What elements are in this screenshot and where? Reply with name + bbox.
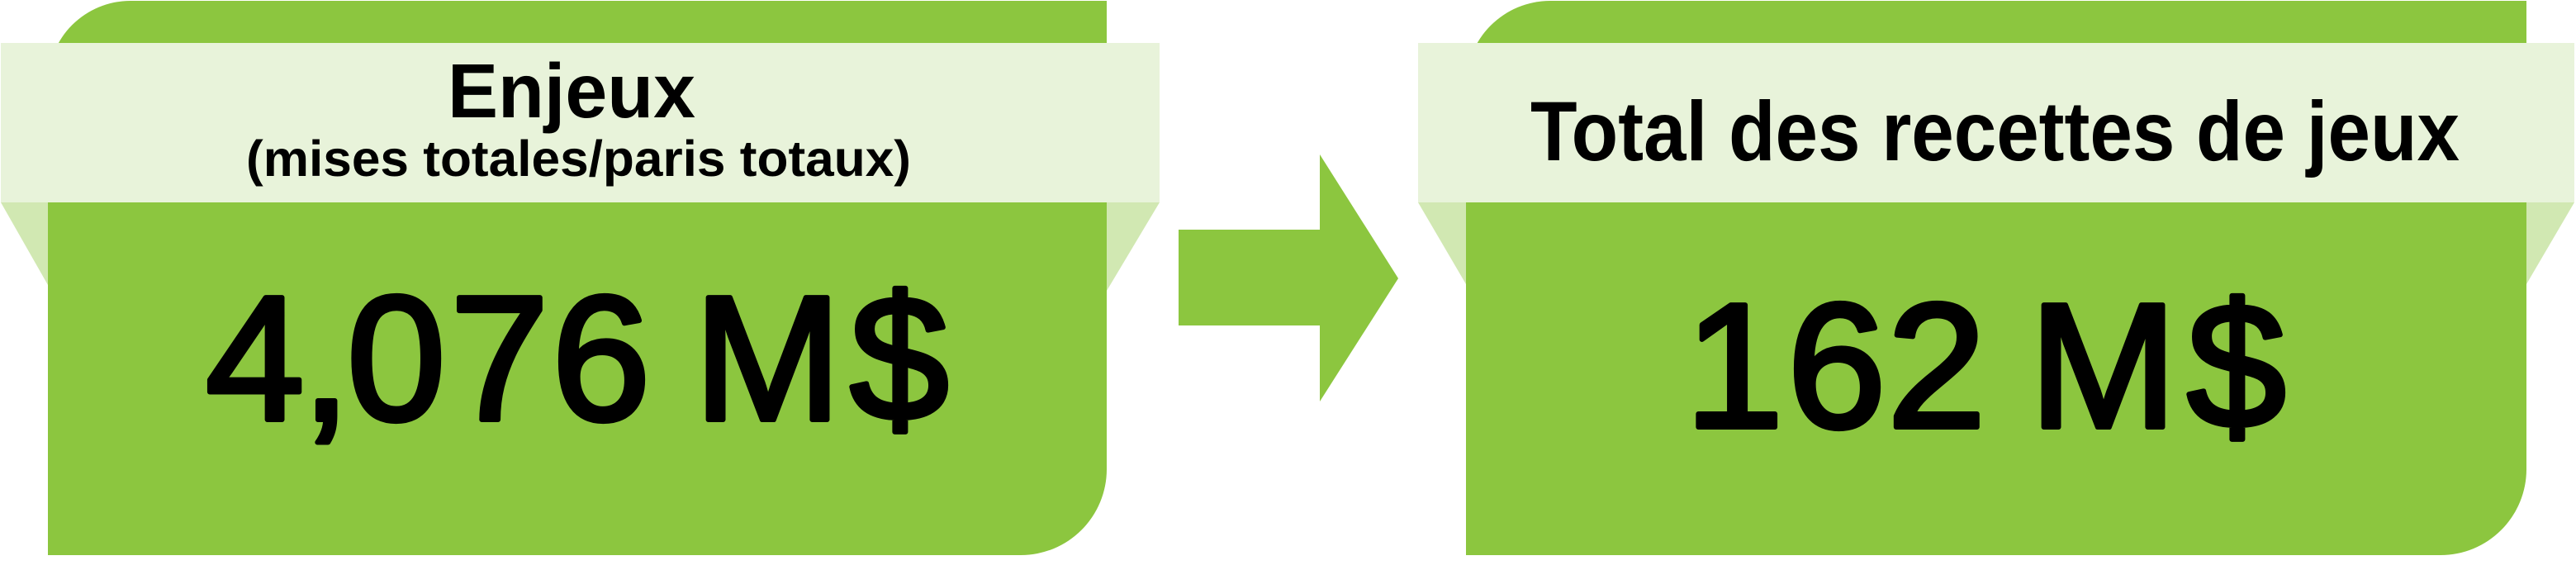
panel: enjeux xyxy=(1,1,1160,555)
right fold xyxy=(2526,202,2574,284)
green card xyxy=(48,1,1107,555)
heading banner xyxy=(1,43,1160,202)
left fold xyxy=(1,202,48,285)
right fold xyxy=(1107,202,1160,291)
value: revenue: 162 M$ xyxy=(1685,266,2286,465)
heading: enjeux: Enjeux xyxy=(448,48,695,134)
left fold xyxy=(1418,202,1466,284)
arrow xyxy=(1179,154,1398,401)
subheading: (mises totales/paris totaux) xyxy=(246,131,911,187)
green card xyxy=(1466,1,2526,555)
panel: total des recettes xyxy=(1418,1,2574,555)
heading banner xyxy=(1418,43,2574,202)
value: wagers: 4,076 M$ xyxy=(206,259,949,458)
heading: total: Total des recettes de jeux xyxy=(1530,84,2460,178)
